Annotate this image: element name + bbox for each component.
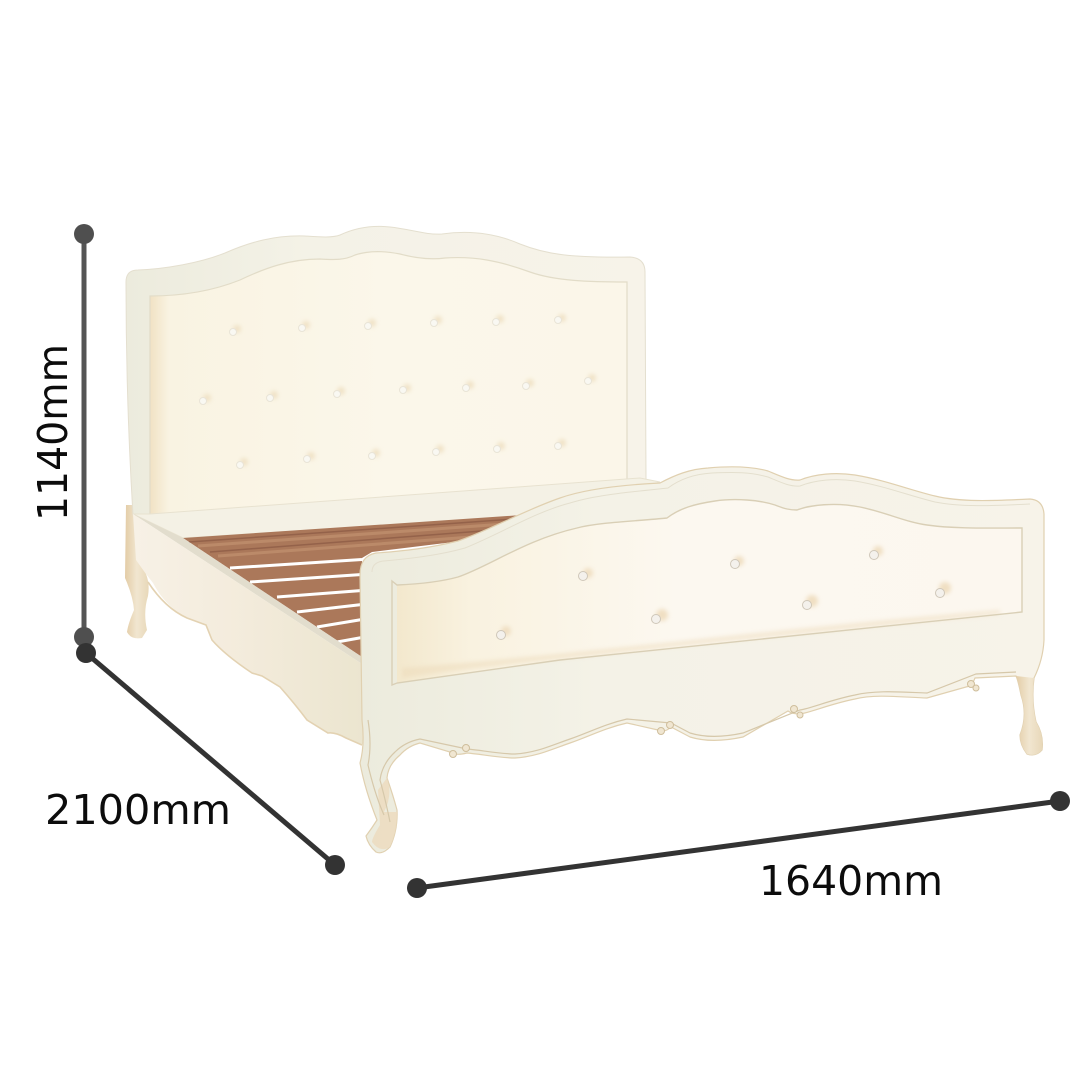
headboard tufting buttons [200,314,596,468]
headboard frame [126,226,646,515]
footboard frame and legs [360,467,1044,853]
side rail top edge [133,514,362,664]
height label: 1140mm [29,344,77,521]
front left leg shading [372,778,397,849]
footboard panel border [392,500,1022,685]
wooden slats [183,515,522,657]
depth label: 2100mm [45,786,231,834]
footboard upholstery bottom shading [402,610,1000,678]
back left leg [125,505,149,638]
side rail bottom moulding [148,582,362,745]
width dimension line [407,791,1070,898]
side rail body [133,514,364,745]
footboard upper moulding [372,472,1030,572]
footboard carved rosettes [450,680,979,758]
footboard [360,467,1044,853]
height dimension line [74,224,94,647]
headboard upholstery panel [150,252,627,515]
depth dimension line [76,643,345,875]
headboard [126,226,646,515]
right leg shading [1016,676,1042,755]
width label: 1640mm [759,857,943,905]
far bed rail [133,478,660,538]
footboard tufting buttons [496,546,951,640]
footboard bottom moulding [368,672,1016,822]
near side rail [133,514,364,745]
footboard upholstery panel [397,500,1022,683]
